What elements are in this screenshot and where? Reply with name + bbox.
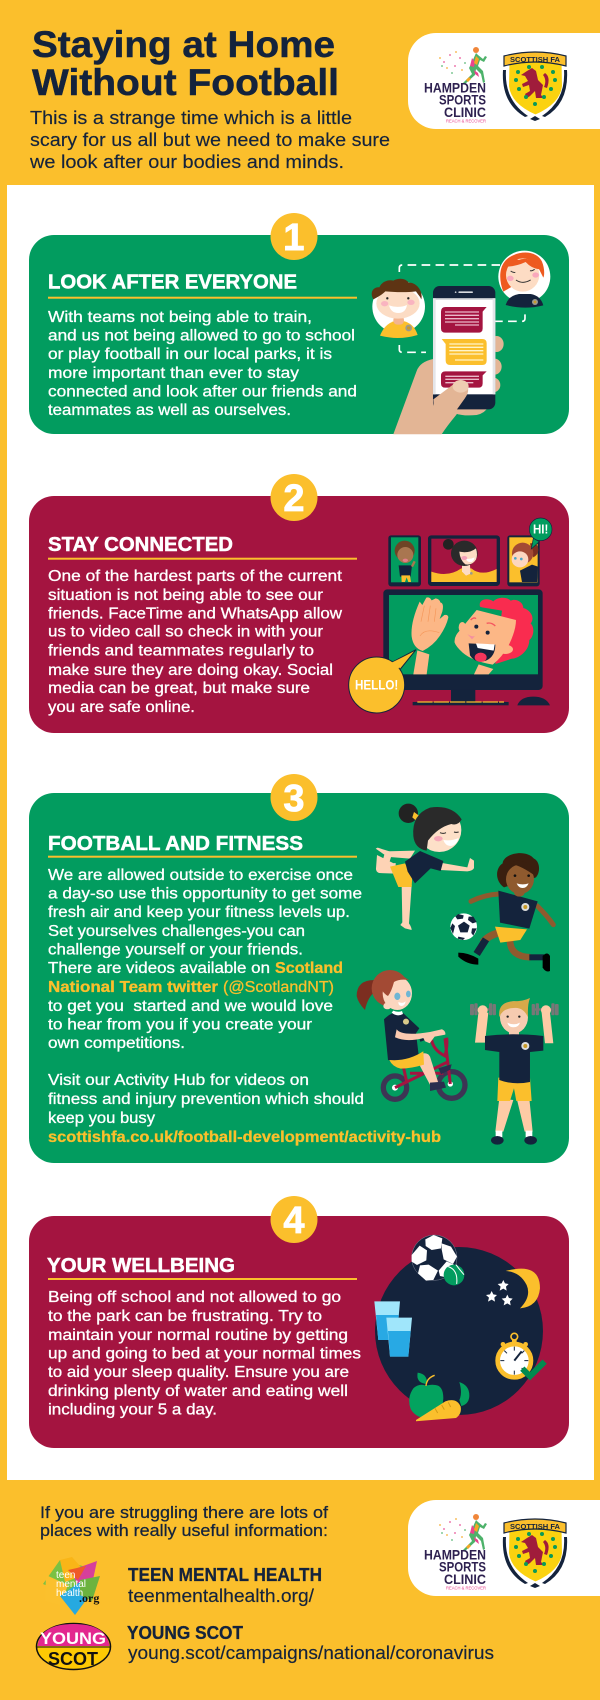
logo: Scottish FA crest	[503, 52, 567, 121]
body text 3: challenge yourself or your friends.	[48, 942, 303, 958]
illustration: kids exercising	[357, 804, 559, 1145]
body text 1: With teams not being able to train,	[48, 309, 312, 326]
logo panel: bottom	[408, 1500, 600, 1596]
hand and phone	[393, 286, 504, 434]
intro text: This is a strange time which is a little	[30, 107, 352, 128]
body text 2: media can be great, but make sure	[48, 680, 310, 697]
logo: Scottish FA crest: SCOTTISH FA	[510, 55, 561, 64]
logo: Scottish FA crest (footer): SCOTTISH FA	[510, 1522, 561, 1531]
logo: Hampden Sports Clinic (footer): SPORTS	[439, 1558, 486, 1574]
body text 1	[48, 309, 357, 419]
phone with boy	[388, 535, 421, 586]
body text 1: more important than ever to stay	[48, 365, 299, 382]
panel 4: your wellbeing	[29, 1196, 569, 1448]
title	[32, 24, 339, 103]
logo: Hampden Sports Clinic (footer)	[424, 1514, 487, 1590]
computer monitor	[383, 589, 550, 705]
logo: teen mental health	[43, 1557, 100, 1615]
body text 4: maintain your normal routine by getting	[48, 1327, 348, 1344]
logo: Hampden Sports Clinic: REACH & RECOVER	[446, 118, 487, 124]
phone with girl	[507, 535, 540, 586]
heading: football and fitness: FOOTBALL AND FITNESS	[48, 833, 303, 855]
resource: young scot: YOUNG SCOT	[127, 1623, 243, 1643]
body text 2: us to video call so check in with your	[48, 624, 323, 641]
logo: Scottish FA crest (footer)	[503, 1519, 567, 1588]
body text 3: scottishfa.co.uk/football-development/activity-hub	[48, 1129, 441, 1146]
body text 3: Scotland	[275, 960, 343, 977]
illustration: video call on a computer	[349, 518, 552, 713]
body text 1: and us not being allowed to go to school	[48, 328, 355, 344]
resource: teen mental health: TEEN MENTAL HEALTH	[128, 1565, 322, 1585]
body text 4: up and going to bed at your normal times	[48, 1346, 361, 1362]
body text 3: fitness and injury prevention which should	[48, 1091, 364, 1108]
resource: young scot	[127, 1623, 494, 1663]
body text 2: friends and teammates regularly to	[48, 643, 314, 660]
tablet with girl	[428, 535, 500, 586]
panel 2: stay connected	[29, 474, 569, 733]
illustration: wellbeing icons on a dark circle	[374, 1235, 545, 1421]
body text 2: make sure they are doing okay. Social	[48, 662, 333, 679]
girl doing yoga	[376, 804, 474, 930]
logo: young scot	[36, 1624, 110, 1670]
logo: teen mental health: mental	[56, 1579, 86, 1590]
body text 1: connected and look after our friends and	[48, 384, 357, 401]
body text 1: or play football in our local parks, it is	[48, 346, 332, 363]
body text 3: to get you started and we would love	[48, 998, 333, 1015]
footer intro text: If you are struggling there are lots of	[40, 1504, 328, 1522]
footer intro text	[40, 1504, 328, 1540]
icon: glasses of water	[374, 1301, 412, 1357]
boy kicking a ball	[450, 853, 553, 972]
body text 2: friends. FaceTime and WhatsApp allow	[48, 606, 343, 623]
speech bubble: HI!	[529, 518, 552, 549]
body text 4: to aid your sleep quality. Ensure you are	[48, 1364, 349, 1381]
intro text	[29, 107, 390, 172]
footer intro text: places with really useful information:	[40, 1522, 328, 1540]
number badge 2	[270, 474, 318, 521]
logo: Hampden Sports Clinic: CLINIC	[444, 104, 486, 120]
heading: look after everyone: LOOK AFTER EVERYONE	[48, 272, 297, 294]
heading: your wellbeing: YOUR WELLBEING	[47, 1255, 235, 1277]
girl avatar	[498, 251, 550, 308]
resource: teen mental health	[128, 1565, 322, 1606]
icon: tennis ball	[444, 1265, 464, 1285]
boy avatar	[372, 279, 425, 338]
body text 4: to the park can be frustrating. Try to	[48, 1308, 322, 1325]
resource: young scot: young.scot/campaigns/national/coronavirus	[128, 1643, 494, 1663]
panel 3: football and fitness	[29, 774, 569, 1163]
title: Without Football	[32, 62, 339, 103]
icon: apple and carrot	[409, 1373, 469, 1421]
body text 3: Set yourselves challenges-you can	[48, 923, 305, 940]
body text 4: including your 5 a day.	[48, 1402, 217, 1418]
logo: Hampden Sports Clinic (footer): HAMPDEN	[424, 1546, 486, 1562]
number badge 2: 2	[283, 478, 305, 520]
body text 2	[48, 568, 343, 716]
speech bubble: HI!: HI!	[533, 523, 548, 537]
girl on a bicycle	[357, 970, 465, 1099]
body text 4: drinking plenty of water and eating well	[48, 1383, 348, 1400]
title: Staying at Home	[32, 24, 335, 65]
intro text: scary for us all but we need to make sure	[30, 129, 390, 150]
logo: teen mental health: .org	[79, 1591, 99, 1605]
number badge 1: 1	[283, 217, 305, 259]
logo: Hampden Sports Clinic	[424, 47, 487, 124]
number badge 3	[270, 774, 318, 821]
logo: teen mental health: health	[56, 1588, 83, 1599]
number badge 1	[270, 213, 318, 260]
body text 3: own competitions.	[48, 1035, 185, 1052]
body text 3: fresh air and keep your fitness levels up.	[48, 904, 350, 921]
body text 3: National Team twitter	[48, 979, 218, 996]
body text 2: One of the hardest parts of the current	[48, 568, 343, 585]
heading: stay connected: STAY CONNECTED	[48, 534, 233, 556]
speech bubble: HELLO!: HELLO!	[355, 677, 398, 693]
body text 3: keep you busy	[48, 1110, 155, 1127]
body text 3: a day-so use this opportunity to get some	[48, 886, 362, 902]
body text 4	[48, 1289, 361, 1418]
speech bubble: HELLO!	[349, 650, 416, 713]
white content panel	[7, 185, 594, 1480]
body text 2: you are safe online.	[48, 699, 195, 716]
icon: moon and stars	[486, 1269, 540, 1308]
panel 1: look after everyone	[29, 213, 569, 434]
icon: stopwatch	[498, 1333, 545, 1377]
body text 4: Being off school and not allowed to go	[48, 1289, 341, 1306]
body text 3: Visit our Activity Hub for videos on	[48, 1072, 309, 1089]
resource: teen mental health: teenmentalhealth.org/	[128, 1586, 314, 1606]
body text 3: There are videos available on	[48, 960, 270, 977]
illustration: friends messaging on a phone	[372, 251, 550, 434]
logo: Hampden Sports Clinic: SPORTS	[439, 92, 486, 108]
body text 3	[48, 867, 441, 1146]
intro text: we look after our bodies and minds.	[29, 151, 344, 172]
icon: football	[412, 1235, 457, 1281]
boy lifting dumbbells	[470, 998, 559, 1145]
body text 3: to hear from you if you create your	[48, 1016, 312, 1034]
number badge 4: 4	[283, 1200, 305, 1242]
number badge 4	[270, 1196, 318, 1243]
logo: Hampden Sports Clinic (footer): CLINIC	[444, 1571, 486, 1587]
body text 3: We are allowed outside to exercise once	[48, 867, 353, 884]
body text 2: situation is not being able to see our	[48, 587, 323, 604]
logo panel: top	[408, 33, 600, 129]
body text 3: (@ScotlandNT)	[223, 979, 334, 996]
body text 1: teammates as well as ourselves.	[48, 402, 291, 419]
logo: young scot: YOUNG	[40, 1629, 106, 1648]
logo: Hampden Sports Clinic (footer): REACH & RECOVER	[446, 1586, 487, 1590]
number badge 3: 3	[283, 778, 305, 820]
logo: young scot: SCOT	[48, 1649, 98, 1669]
logo: Hampden Sports Clinic: HAMPDEN	[424, 80, 486, 96]
waving boy on screen	[411, 597, 533, 674]
logo: teen mental health: teen	[56, 1570, 75, 1581]
